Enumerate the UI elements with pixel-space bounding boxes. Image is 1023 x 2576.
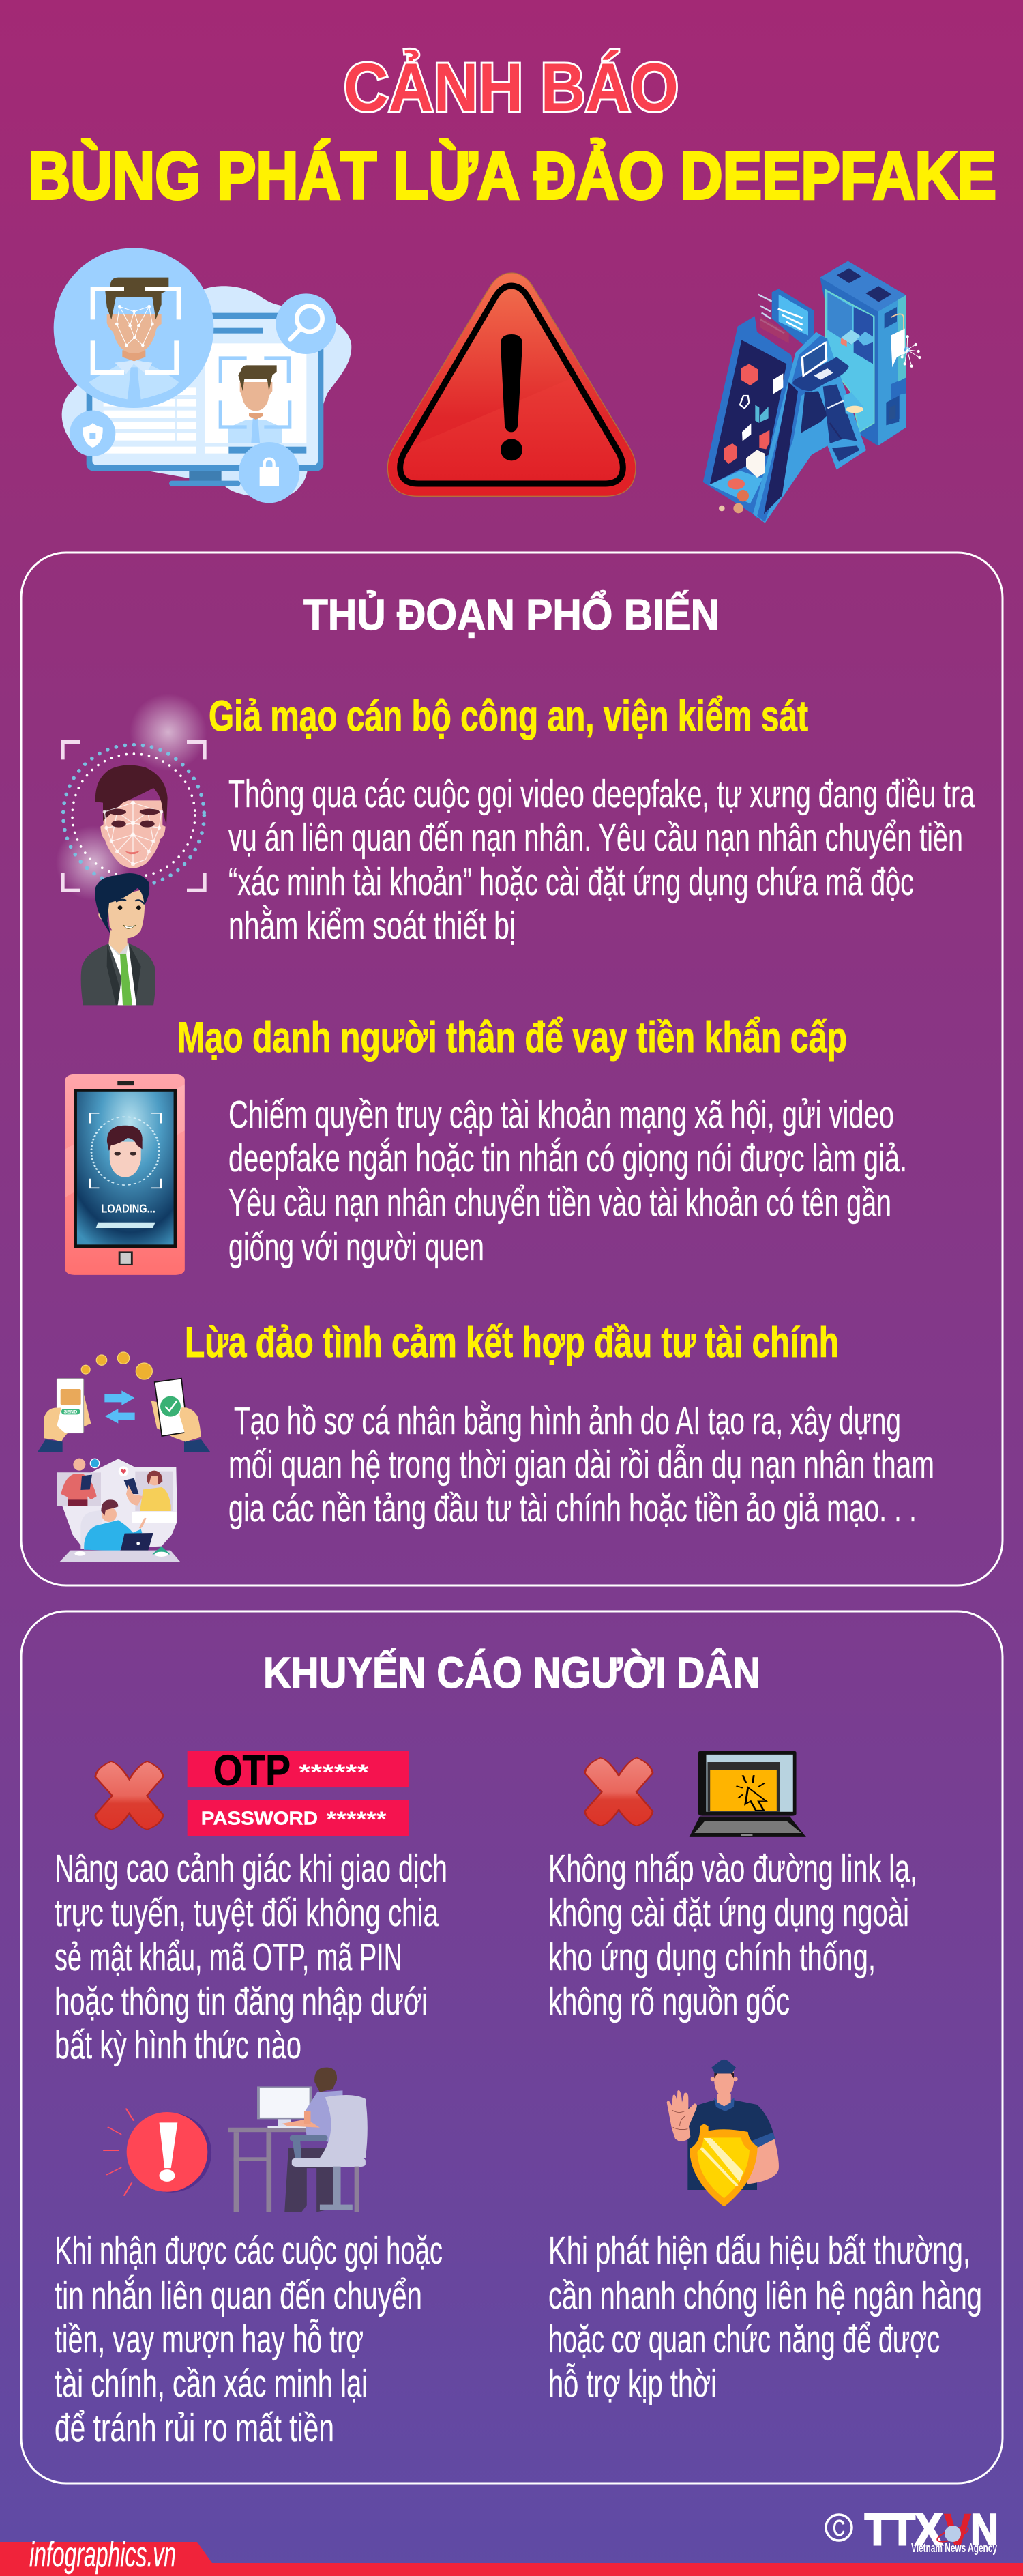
logo globe — [936, 2524, 970, 2545]
icon: red cross with OTP and password: OTP — [213, 1746, 291, 1794]
send label: SEND — [63, 1410, 78, 1415]
text: advice 3: Khi nhận được các cuộc gọi hoặc — [55, 2229, 443, 2272]
text: advice 3: tin nhắn liên quan đến chuyển — [55, 2274, 422, 2317]
text: advice 1: Nâng cao cảnh giác khi giao dịch — [55, 1847, 447, 1890]
heading: common tricks: THỦ ĐOẠN PHỔ BIẾN — [303, 589, 720, 639]
icon: red cross with OTP and password — [95, 1746, 409, 1836]
text: item 1: nhằm kiểm soát thiết bị — [228, 904, 516, 948]
icon: red cross with OTP and password: PASSWORD — [201, 1807, 318, 1829]
text: advice 1: trực tuyến, tuyệt đối không chia — [55, 1891, 439, 1935]
text: advice 1: hoặc thông tin đăng nhập dưới — [55, 1980, 428, 2023]
icon: phone with face scan: LOADING... — [101, 1202, 155, 1216]
footer bar — [0, 2535, 1023, 2576]
logo letters TTX: TTX — [865, 2504, 943, 2554]
logo letter N: N — [970, 2504, 998, 2554]
text: advice 3: tài chính, cần xác minh lại — [55, 2362, 368, 2405]
text: item 2 — [228, 1093, 907, 1269]
icon: money transfer and video dating — [38, 1352, 210, 1562]
icon: police officer with shield — [667, 2060, 779, 2207]
logo letter V: V — [944, 2504, 971, 2554]
title line: warning: CẢNH BÁO — [344, 49, 679, 125]
text: advice 4 — [548, 2229, 982, 2405]
text: advice 4: hỗ trợ kịp thời — [548, 2362, 717, 2405]
icon: red cross with laptop — [584, 1751, 806, 1837]
logo: TTXVN — [826, 2504, 998, 2555]
footer site name: infographics.vn — [29, 2535, 176, 2575]
text: advice 3: tiền, vay mượn hay hỗ trợ — [55, 2317, 364, 2361]
icon: warning triangle — [387, 273, 636, 496]
text: item 1 — [228, 772, 975, 948]
icon: facial scan with man in suit — [56, 694, 207, 1005]
password mask: ****** — [327, 1807, 387, 1831]
icon: isometric AI letters — [703, 261, 921, 523]
item 1 heading: Giả mạo cán bộ công an, viện kiểm sát — [209, 692, 808, 740]
item 3 heading: Lừa đảo tình cảm kết hợp đầu tư tài chính — [185, 1319, 839, 1366]
text: advice 2 — [548, 1847, 917, 2023]
text: advice 2: kho ứng dụng chính thống, — [548, 1935, 876, 1979]
text: advice 3 — [55, 2229, 443, 2450]
otp mask: ****** — [299, 1761, 369, 1784]
title — [28, 49, 996, 213]
text: advice 1: bất kỳ hình thức nào — [55, 2023, 301, 2067]
text: advice 1: sẻ mật khẩu, mã OTP, mã PIN — [55, 1935, 402, 1979]
icon: alert and person at computer — [103, 2068, 368, 2212]
text: advice 2: không rõ nguồn gốc — [548, 1980, 790, 2023]
text: item 2: giống với người quen — [228, 1225, 484, 1269]
text: item 3 — [228, 1399, 934, 1530]
heading: advice: KHUYẾN CÁO NGƯỜI DÂN — [263, 1648, 760, 1697]
icon: phone with face scan — [65, 1074, 185, 1275]
icon: face recognition on monitor — [54, 248, 351, 503]
text: advice 1 — [55, 1847, 447, 2067]
text: advice 3: để tránh rủi ro mất tiền — [55, 2406, 334, 2450]
copyright mark: C — [833, 2515, 845, 2541]
